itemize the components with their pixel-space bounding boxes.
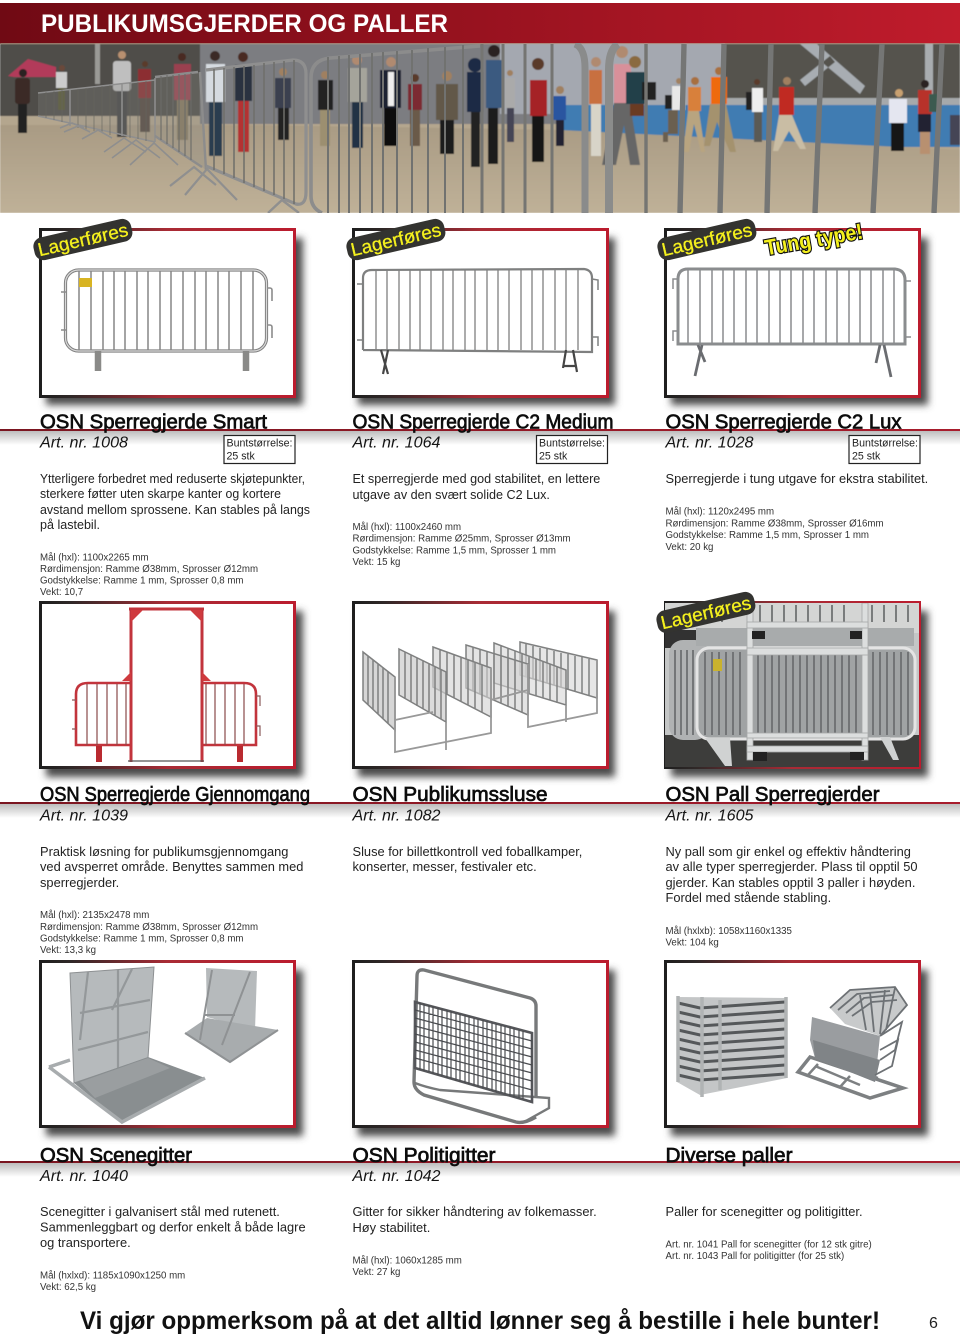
- product text: Scenegitter: OSN Scenegitter: [40, 1145, 192, 1167]
- bundle size box: 25 stk: [539, 450, 568, 462]
- panel: Politigitter image: [354, 962, 615, 1136]
- product text: Scenegitter: og transportere.: [40, 1235, 131, 1250]
- panel: C2 Medium fence image: [354, 230, 615, 405]
- badge: Lagerføres C2 lux: Lagerføres: [660, 219, 754, 260]
- product text: Pall Sperregjerder: av alle typer sperregjerder. Plass til opptil 50: [666, 859, 918, 874]
- product text: C2 Lux: Mål (hxl): 1120x2495 mm: [666, 506, 774, 518]
- product text: Politigitter: [351, 1145, 597, 1278]
- product text: Publikumssluse: [351, 784, 582, 874]
- product text: C2 Lux: Godstykkelse: Ramme 1,5 mm, Sprosser 1 mm: [666, 530, 869, 541]
- panel: Publikumssluse image: [354, 602, 615, 777]
- product text: Gjennomgang: Rørdimensjon: Ramme Ø38mm, Sprosser Ø12mm: [40, 922, 258, 933]
- fence drawing: sluice: [363, 642, 597, 752]
- product text: Publikumssluse: OSN Publikumssluse: [352, 784, 548, 806]
- product text: Smart: Ytterligere forbedret med reduserte skjøtepunkter,: [40, 471, 305, 486]
- bundle size box: Buntstørrelse:: [852, 438, 918, 450]
- product text: C2 Lux: Art. nr. 1028: [664, 434, 754, 452]
- fence drawing: Smart: [61, 270, 272, 371]
- product text: Politigitter: Vekt: 27 kg: [352, 1267, 400, 1278]
- product text: Scenegitter: Sammenleggbart og derfor enkelt å både lagre: [40, 1220, 306, 1234]
- product text: Smart: Mål (hxl): 1100x2265 mm: [40, 552, 149, 564]
- product text: Scenegitter: [39, 1145, 306, 1293]
- product text: C2 Medium: [351, 412, 614, 568]
- bundle size box: [224, 436, 295, 464]
- hero photo: crowd behind fences: [0, 43, 960, 213]
- product text: Publikumssluse: Sluse for billettkontroll ved foballkamper,: [352, 844, 582, 859]
- bundle size box: [849, 436, 920, 464]
- product text: Gjennomgang: Mål (hxl): 2135x2478 mm: [40, 910, 149, 921]
- product text: C2 Medium: utgave av den svært solide C2 Lux.: [352, 488, 550, 502]
- product text: Gjennomgang: Art. nr. 1039: [39, 808, 128, 824]
- product text: Scenegitter: Vekt: 62,5 kg: [40, 1282, 96, 1293]
- product text: C2 Lux: Sperregjerde i tung utgave for ekstra stabilitet.: [666, 471, 928, 486]
- product text: Smart: sterkere føtter uten skarpe kanter og kortere: [40, 486, 281, 501]
- product text: Pall Sperregjerder: gjerder. Kan stables opptil 3 paller i høyden.: [666, 875, 915, 890]
- product text: Diverse paller: Art. nr. 1043 Pall for politigitter (for 25 stk): [666, 1251, 844, 1262]
- product text: Scenegitter: Mål (hxlxd): 1185x1090x1250 mm: [40, 1270, 185, 1282]
- crowd barrier small: [185, 968, 278, 1062]
- product text: Pall Sperregjerder: [664, 784, 918, 948]
- product text: Diverse paller: Diverse paller: [666, 1145, 793, 1167]
- product text: C2 Medium: Vekt: 15 kg: [352, 557, 400, 568]
- bundle size box: 25 stk: [226, 450, 255, 462]
- page number: 6: [929, 1315, 938, 1332]
- product text: Gjennomgang: Praktisk løsning for publikumsgjennomgang: [40, 844, 288, 859]
- product text: Politigitter: OSN Politigitter: [352, 1145, 496, 1167]
- product text: C2 Lux: OSN Sperregjerde C2 Lux: [666, 412, 902, 434]
- title: PUBLIKUMSGJERDER OG PALLER: [41, 11, 448, 38]
- product text: C2 Medium: Godstykkelse: Ramme 1,5 mm, Sprosser 1 mm: [352, 546, 556, 556]
- product text: Smart: Godstykkelse: Ramme 1 mm, Sprosser 0,8 mm: [40, 576, 244, 586]
- fences: [38, 44, 942, 213]
- product text: Smart: avstand mellom sprossene. Kan stables på langs: [40, 502, 310, 517]
- panel: Pall Sperregjerder photo: [665, 602, 928, 777]
- fence drawing: C2 Lux: [673, 269, 911, 377]
- product text: Gjennomgang: OSN Sperregjerde Gjennomgang: [40, 784, 310, 806]
- header band: [0, 3, 960, 44]
- panel: C2 Lux fence image: [666, 230, 928, 405]
- product text: Politigitter: Gitter for sikker håndtering av folkemasser.: [352, 1204, 597, 1219]
- product text: C2 Medium: OSN Sperregjerde C2 Medium: [352, 412, 614, 434]
- red gate drawing: [72, 608, 260, 762]
- badge: Lagerføres pall: Lagerføres: [659, 592, 753, 633]
- product text: Pall Sperregjerder: Fordel med stående stabling.: [666, 890, 831, 905]
- bundle size box: [536, 436, 608, 464]
- product text: Smart: på lastebil.: [40, 517, 100, 532]
- product text: Diverse paller: [666, 1145, 872, 1262]
- product text: Smart: OSN Sperregjerde Smart: [40, 412, 267, 434]
- product text: Scenegitter: Art. nr. 1040: [39, 1168, 128, 1185]
- badge: Lagerføres smart: Lagerføres: [36, 219, 130, 260]
- product text: C2 Medium: Art. nr. 1064: [351, 434, 441, 452]
- panel: Scenegitter image: [40, 962, 303, 1136]
- product text: Smart: Vekt: 10,7: [40, 587, 83, 598]
- product text: Pall Sperregjerder: Mål (hxlxb): 1058x1160x1335: [666, 926, 792, 937]
- product text: Politigitter: Mål (hxl): 1060x1285 mm: [352, 1256, 462, 1266]
- bundle size box: 25 stk: [852, 450, 881, 462]
- product text: Politigitter: Art. nr. 1042: [351, 1168, 441, 1185]
- panel: Smart fence image: [40, 230, 303, 405]
- product text: Politigitter: Høy stabilitet.: [352, 1220, 430, 1235]
- product text: Diverse paller: Art. nr. 1041 Pall for scenegitter (for 12 stk gitre): [666, 1240, 872, 1250]
- product text: Pall Sperregjerder: OSN Pall Sperregjerder: [666, 784, 880, 806]
- bundle size box: Buntstørrelse:: [226, 438, 292, 450]
- product text: Pall Sperregjerder: Art. nr. 1605: [664, 808, 754, 824]
- product text: C2 Medium: Mål (hxl): 1100x2460 mm: [352, 522, 461, 533]
- product text: Pall Sperregjerder: Ny pall som gir enkel og effektiv håndtering: [666, 844, 911, 859]
- badge: Lagerføres C2 medium: Lagerføres: [349, 219, 443, 260]
- product text: C2 Lux: [664, 412, 928, 553]
- product text: Gjennomgang: ved avsperret område. Benyttes sammen med: [40, 859, 303, 874]
- badge: Tung type: Tung type!: [763, 218, 865, 260]
- header rule under row 2 headings: [0, 802, 960, 818]
- panel: Diverse paller image: [666, 962, 928, 1136]
- product text: Gjennomgang: Godstykkelse: Ramme 1 mm, Sprosser 0,8 mm: [40, 934, 244, 944]
- product text: Gjennomgang: [39, 784, 310, 956]
- pallet photo contents: [665, 603, 919, 767]
- header rule under row 1 headings: [0, 429, 960, 445]
- product text: C2 Medium: Rørdimensjon: Ramme Ø25mm, Sprosser Ø13mm: [352, 534, 571, 544]
- tilted pallet right: [798, 987, 907, 1098]
- product text: Publikumssluse: konserter, messer, festivaler etc.: [352, 859, 537, 874]
- product text: Smart: Art. nr. 1008: [39, 434, 128, 452]
- product text: Smart: Rørdimensjon: Ramme Ø38mm, Sprosser Ø12mm: [40, 564, 258, 575]
- header rule under row 3 headings: [0, 1161, 960, 1177]
- product text: Smart: [39, 412, 310, 598]
- product text: Scenegitter: Scenegitter i galvanisert stål med rutenett.: [40, 1204, 280, 1219]
- bundle size box: Buntstørrelse:: [539, 438, 605, 450]
- crowd barrier large: [49, 967, 278, 1122]
- product text: C2 Lux: Vekt: 20 kg: [666, 542, 713, 553]
- stacked pallet left: [677, 987, 907, 1098]
- product text: Gjennomgang: Vekt: 13,3 kg: [40, 945, 96, 956]
- product text: Pall Sperregjerder: Vekt: 104 kg: [666, 938, 719, 948]
- crowd: [15, 45, 960, 167]
- mesh barrier drawing: [414, 970, 549, 1122]
- product text: C2 Medium: Et sperregjerde med god stabilitet, en lettere: [352, 472, 600, 486]
- product text: Gjennomgang: sperregjerder.: [40, 875, 119, 890]
- product text: C2 Lux: Rørdimensjon: Ramme Ø38mm, Sprosser Ø16mm: [666, 518, 884, 530]
- fence drawing: C2 Medium: [357, 269, 598, 374]
- panel: Gjennomgang gate image: [40, 602, 303, 777]
- product text: Publikumssluse: Art. nr. 1082: [351, 808, 441, 824]
- product text: Diverse paller: Paller for scenegitter og politigitter.: [666, 1204, 863, 1219]
